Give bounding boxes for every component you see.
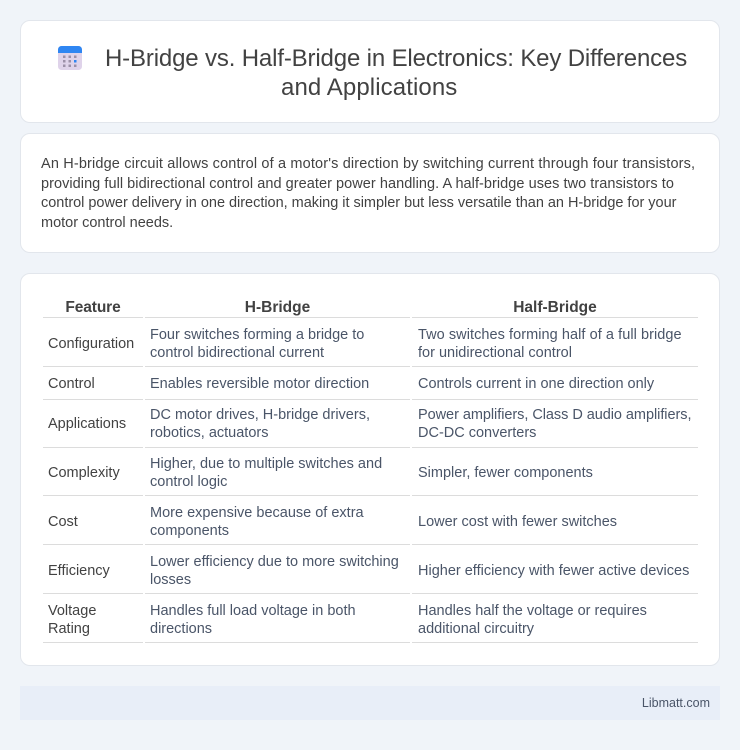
intro text: motor control needs. [41, 215, 173, 231]
row: applications: DC motor drives, H-bridge drivers, [150, 407, 370, 423]
row: applications [43, 407, 698, 448]
panel: comparison table card [20, 273, 720, 666]
row: complexity: control logic [150, 474, 227, 490]
row: control: Control [48, 376, 95, 392]
table header row [43, 299, 698, 318]
intro text: providing full bidirectional control and greater power handling. A half-bridge uses two transistors to [41, 176, 674, 192]
row: complexity [43, 456, 698, 496]
footer bar [20, 686, 720, 720]
row: voltage rating: Handles half the voltage or requires [418, 603, 647, 619]
title: H-Bridge vs. Half-Bridge in Electronics: Key Differences [105, 45, 687, 72]
row: cost: More expensive because of extra [150, 505, 364, 521]
row: voltage rating: Voltage [48, 603, 96, 619]
row: cost: Cost [48, 514, 78, 530]
row: efficiency: Efficiency [48, 563, 110, 579]
row: applications: robotics, actuators [150, 425, 268, 441]
row: applications: DC-DC converters [418, 425, 536, 441]
row: voltage rating: additional circuitry [418, 621, 534, 637]
row: complexity: Simpler, fewer components [418, 465, 593, 481]
panel: intro text card [20, 133, 720, 253]
row: efficiency: losses [150, 572, 191, 588]
row: applications: Applications [48, 416, 126, 432]
row: configuration: Two switches forming half of a full bridge [418, 327, 682, 343]
row: configuration: control bidirectional current [150, 345, 324, 361]
intro text [41, 156, 695, 231]
row: voltage rating: Rating [48, 621, 90, 637]
panel: title card [20, 20, 720, 123]
intro text: control power delivery in one direction, making it simpler but less versatile than an H-bridge for your [41, 195, 676, 211]
footer credit: Libmatt.com [642, 696, 710, 710]
table header row: H-Bridge [245, 299, 310, 316]
row: configuration: Four switches forming a bridge to [150, 327, 364, 343]
row: voltage rating [43, 603, 698, 643]
row: efficiency: Higher efficiency with fewer active devices [418, 563, 689, 579]
row: cost: Lower cost with fewer switches [418, 514, 617, 530]
table header row: Feature [65, 299, 121, 316]
icon: calendar [58, 46, 82, 70]
comparison table [43, 299, 698, 643]
title: and Applications [281, 74, 457, 101]
row: cost: components [150, 523, 229, 539]
row: cost [43, 505, 698, 545]
row: complexity: Complexity [48, 465, 120, 481]
row: control: Enables reversible motor direction [150, 376, 369, 392]
row: control [43, 376, 698, 400]
row: applications: Power amplifiers, Class D audio amplifiers, [418, 407, 691, 423]
row: voltage rating: directions [150, 621, 212, 637]
title [105, 45, 687, 101]
table header row: Half-Bridge [513, 299, 597, 316]
row: voltage rating: Handles full load voltage in both [150, 603, 356, 619]
row: configuration: Configuration [48, 336, 134, 352]
row: complexity: Higher, due to multiple switches and [150, 456, 382, 472]
row: efficiency: Lower efficiency due to more switching [150, 554, 399, 570]
row: control: Controls current in one direction only [418, 376, 654, 392]
row: configuration [43, 327, 698, 367]
row: efficiency [43, 554, 698, 594]
intro text: An H-bridge circuit allows control of a motor's direction by switching current through four transistors, [41, 156, 695, 172]
row: configuration: for unidirectional control [418, 345, 572, 361]
